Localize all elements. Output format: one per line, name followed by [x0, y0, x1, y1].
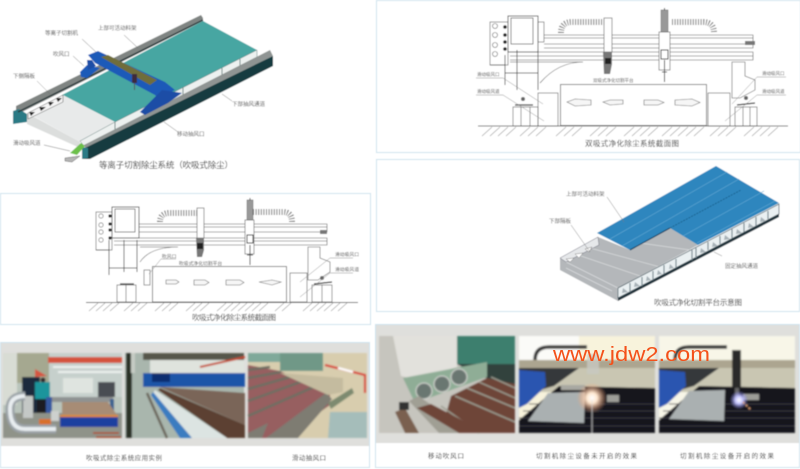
teal table top — [62, 21, 257, 122]
panel: blow-suction section drawing — [0, 194, 370, 324]
photo: sliding suction port — [246, 352, 368, 440]
panel: effect photos right — [376, 324, 800, 468]
labels: 下部抽风通道 — [232, 100, 266, 108]
labels — [476, 70, 786, 121]
labels: 滑动吸风口 — [335, 251, 359, 258]
airflow arrows — [166, 280, 281, 285]
labels: 滑动吸风道 — [477, 88, 500, 95]
cutting machine — [96, 198, 330, 280]
caption: application example: 吹吸式除尘系统应用实例 — [86, 453, 162, 462]
green sliding suction duct — [65, 143, 85, 162]
gray platform body — [560, 228, 698, 301]
leader lines — [37, 35, 232, 151]
back rail — [13, 15, 203, 124]
caption: off: 切割机除尘设备未开启的效果 — [536, 451, 638, 460]
photo: cutting table — [124, 352, 246, 440]
labels: 滑动吸风口 — [762, 70, 784, 77]
panel: plasma cutting dust removal isometric view — [0, 0, 281, 185]
photo: workshop machine — [2, 352, 124, 440]
table and supports — [513, 84, 757, 126]
labels: 滑动吸风道 — [335, 266, 359, 273]
caption: sliding port: 滑动抽风口 — [292, 453, 326, 462]
labels: 下侧隔板 — [13, 72, 36, 80]
table front face — [27, 50, 257, 148]
ground with hatch — [86, 302, 358, 311]
table and supports — [117, 266, 332, 302]
labels: 吹吸式净化切割平台 — [179, 260, 222, 267]
airflow arrows — [567, 99, 700, 106]
labels: 滑动吸风道 — [762, 88, 785, 95]
caption: 吹吸式净化除尘系统截面图 — [192, 312, 276, 322]
photo: dust removal on — [658, 336, 796, 434]
labels: 上部可活动料架 — [566, 190, 605, 198]
platform right face with windows — [618, 204, 779, 301]
labels: 吹风口 — [162, 253, 177, 260]
labels: 固定抽风通道 — [725, 262, 759, 270]
leader lines — [571, 197, 722, 256]
panel: application photos left — [0, 342, 370, 468]
panel: blow-suction platform diagram — [376, 160, 800, 312]
front rail — [82, 50, 273, 159]
labels: 滑动吸风道 — [13, 139, 41, 147]
caption: 吹吸式净化切割平台示意图 — [654, 297, 742, 307]
gantry: plasma cutting machine — [80, 51, 182, 115]
caption: 等离子切割除尘系统（吹吸式除尘） — [99, 160, 233, 170]
labels — [149, 251, 359, 297]
cutting machine — [490, 8, 755, 98]
labels: 滑动吸风口 — [477, 71, 500, 78]
labels: 移动抽风口 — [177, 130, 205, 138]
ground with hatch — [478, 126, 788, 136]
labels: 双吸式净化切割平台 — [593, 77, 634, 84]
photo: moving blow port — [378, 334, 516, 434]
caption: 双吸式净化除尘系统截面图 — [585, 138, 679, 148]
caption: on: 切割机除尘设备开启的效果 — [680, 451, 774, 460]
open end with slots — [560, 237, 599, 262]
labels: 上部可活动料架 — [98, 24, 137, 32]
gray lower plate — [28, 95, 115, 142]
gray plate seams — [566, 243, 690, 291]
photo: dust removal off — [518, 336, 656, 434]
labels — [549, 190, 759, 270]
labels — [13, 24, 266, 147]
panel: double-suction section drawing — [376, 0, 800, 152]
labels: 等离子切割机 — [45, 29, 79, 37]
watermark: www.jdw2.com — [552, 344, 710, 366]
caption: moving blow port: 移动吹风口 — [428, 451, 464, 460]
blue upper rack — [597, 166, 779, 250]
labels: 吹风口 — [53, 50, 70, 58]
labels: 下部隔板 — [549, 217, 572, 225]
